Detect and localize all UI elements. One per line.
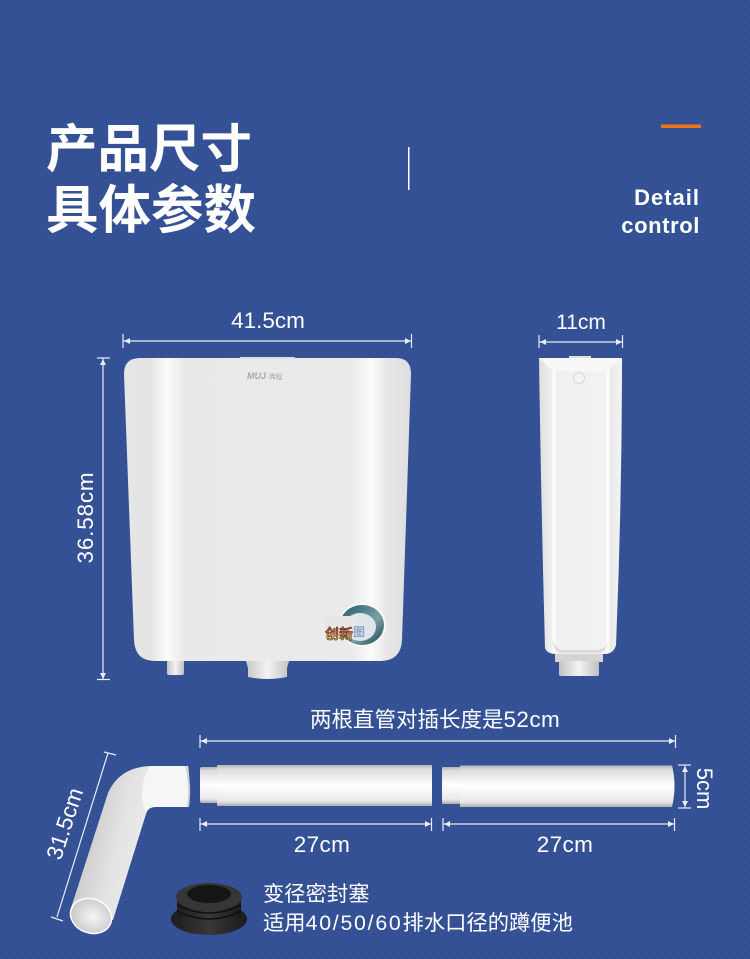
rubber reducer seal xyxy=(171,883,247,935)
dimension: pipe diameter 5cm xyxy=(678,765,717,809)
dimension: elbow length 31.5cm xyxy=(42,752,116,921)
dimension: tank width 41.5cm xyxy=(123,308,412,348)
title xyxy=(46,107,256,244)
side view of water tank xyxy=(539,356,622,676)
side body xyxy=(539,358,622,654)
dimension: elbow length 31.5cm: 31.5cm xyxy=(42,785,88,863)
side outlet xyxy=(555,652,603,676)
dimension: pipe diameter 5cm: 5cm xyxy=(692,768,717,809)
dimension: total 52cm xyxy=(200,703,676,748)
seal description: 适用40/50/60排水口径的蹲便池 xyxy=(263,906,573,937)
title: 具体参数 xyxy=(46,168,256,244)
dimension: tank height 36.58cm: 36.58cm xyxy=(73,472,98,563)
front view of water tank xyxy=(124,357,411,679)
tank logo: MUJ·沸程 xyxy=(247,371,282,381)
tank outlet pipes xyxy=(167,658,290,679)
subtitle: Detail control: control xyxy=(621,213,700,238)
side valve hole xyxy=(574,372,584,384)
subtitle: Detail control: Detail xyxy=(634,185,700,210)
dimension: pipe 2 length 27cm xyxy=(443,818,675,857)
straight pipe 1 xyxy=(200,765,432,806)
vertical title divider xyxy=(408,147,410,190)
subtitle: Detail control xyxy=(621,185,700,238)
dimension: pipe 2 length 27cm: 27cm xyxy=(537,832,593,857)
title: 产品尺寸 xyxy=(46,107,252,182)
tank body xyxy=(124,358,411,661)
straight pipe 2 xyxy=(442,766,674,807)
dimension: total 52cm: 两根直管对插长度是52cm xyxy=(310,703,560,734)
dimension: side width 11cm xyxy=(539,311,623,348)
dimension: pipe 1 length 27cm xyxy=(200,818,432,857)
tank badge: 创新 xyxy=(325,626,353,642)
seal description: 变径密封塞 xyxy=(263,877,370,908)
seal description xyxy=(263,877,573,937)
dimension: tank height 36.58cm xyxy=(73,358,110,680)
elbow opening xyxy=(65,893,117,939)
dimension: pipe 1 length 27cm: 27cm xyxy=(294,832,350,857)
tank badge xyxy=(325,603,386,647)
orange accent bar xyxy=(661,124,701,128)
dimension: tank width 41.5cm: 41.5cm xyxy=(231,308,305,333)
tank badge: 图 xyxy=(353,625,365,639)
elbow pipe xyxy=(65,766,190,939)
dimension: side width 11cm: 11cm xyxy=(556,311,606,334)
